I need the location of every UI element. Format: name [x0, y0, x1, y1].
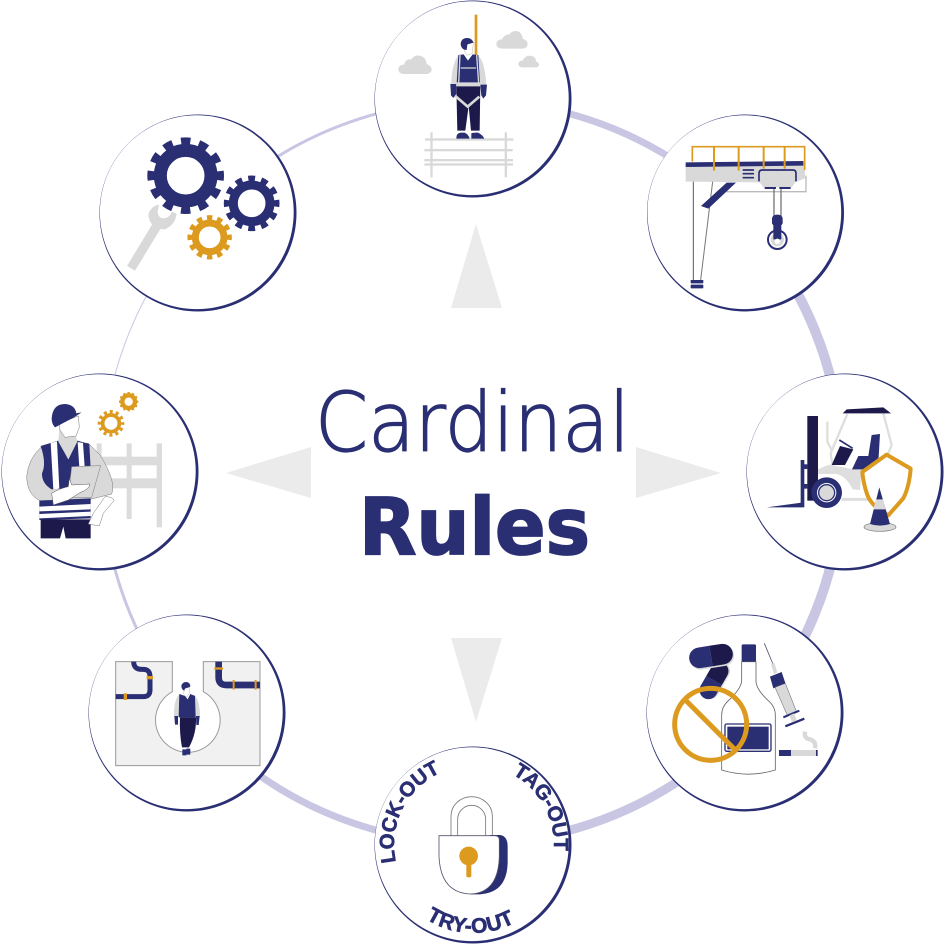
panel: inspector worker: [2, 374, 198, 570]
panel: drugs and alcohol: [646, 614, 844, 812]
icon: worker with clipboard: [27, 404, 114, 538]
icon: bottle: [722, 644, 775, 774]
panel: lock-out tag-out try-out: [374, 746, 572, 944]
icon: prohibition sign: [675, 688, 747, 760]
panel: lifting crane: [647, 114, 844, 312]
icon: cigarette: [779, 732, 818, 756]
arrow: up: [451, 224, 502, 308]
icon: pipes: [116, 662, 260, 697]
label: TRY-OUT: TRY-OUT: [430, 906, 511, 934]
icon: railing: [424, 132, 513, 177]
icon: syringe: [764, 643, 804, 726]
icon: crane: [686, 147, 806, 288]
icon: underground block: [116, 662, 260, 766]
icon: large navy gear: [151, 141, 220, 210]
icon: gold gear: [190, 218, 229, 257]
icon: shield: [862, 455, 911, 515]
icon: padlock: [439, 797, 508, 894]
icon: forklift: [767, 407, 892, 508]
ring: connecting arcs: [102, 101, 842, 843]
icon: worker in harness: [450, 38, 487, 139]
arrow: down: [451, 638, 502, 722]
panel: forklift and traffic safety: [746, 374, 944, 570]
icon: medium navy gear: [227, 178, 277, 228]
label: LOCK-OUT: LOCK-OUT: [379, 760, 437, 864]
icon: capsules: [688, 642, 736, 703]
icon: traffic cone: [864, 487, 896, 531]
icon: worker in hole: [174, 682, 200, 755]
icon: shelving: [97, 443, 162, 527]
arrow: left: [226, 447, 311, 498]
label: TAG-OUT: TAG-OUT: [516, 762, 568, 851]
title line: Cardinal: Cardinal: [315, 376, 630, 471]
panel: maintenance gears: [100, 114, 296, 312]
icon: wrench: [131, 205, 177, 268]
arrow: right: [636, 447, 721, 498]
icon: clouds: [398, 31, 539, 74]
panel: confined space: [88, 614, 286, 812]
icon: lifeline: [475, 15, 477, 58]
panel: fall protection: [374, 0, 572, 198]
icon: small gears: [99, 393, 137, 435]
title line: Rules: Rules: [359, 483, 590, 573]
